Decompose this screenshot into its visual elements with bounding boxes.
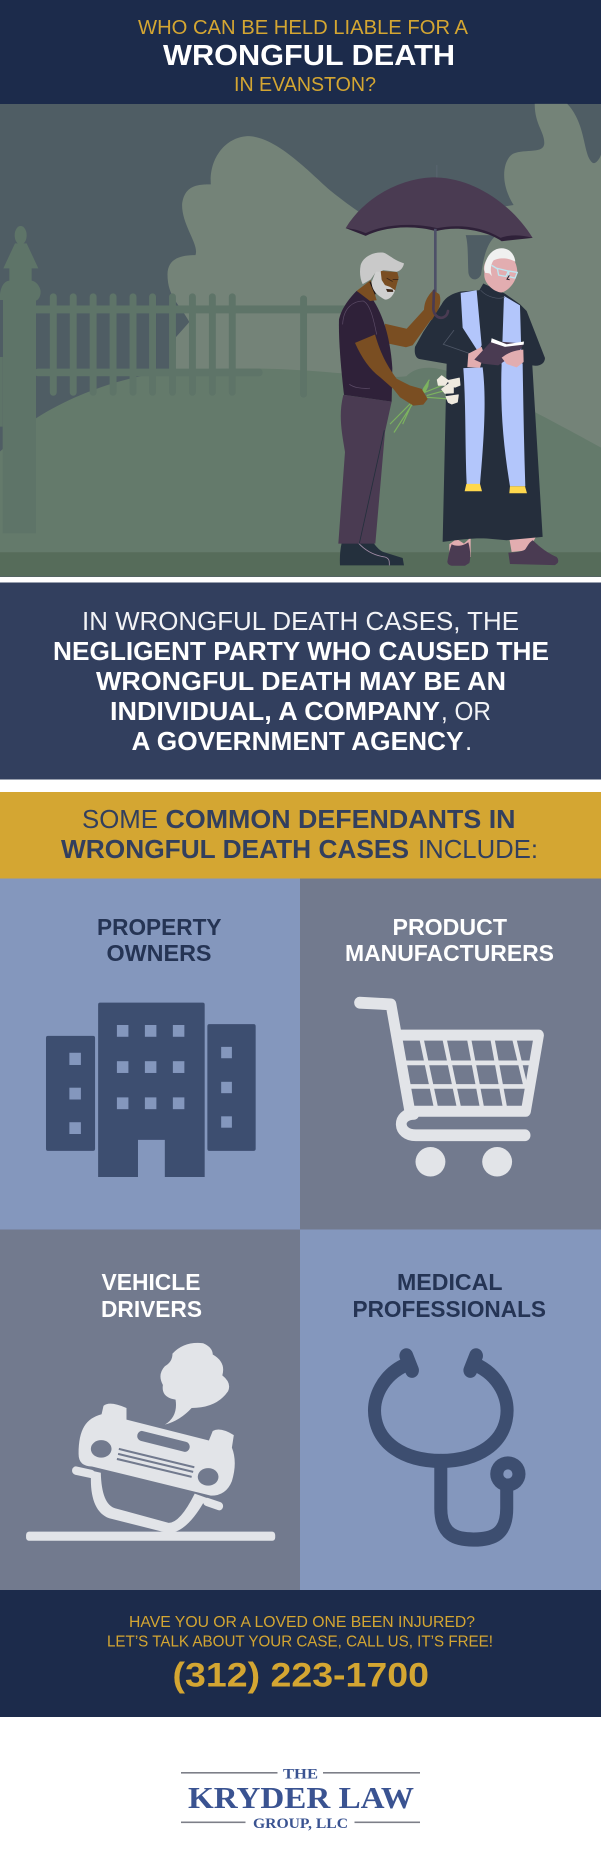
panel: negligent party statement: INDIVIDUAL, A COMPANY xyxy=(110,696,440,726)
heading: common defendants: SOME xyxy=(82,804,158,834)
illustration: mourning man xyxy=(338,252,460,565)
panel: negligent party statement: A GOVERNMENT AGENCY xyxy=(132,726,464,756)
icon: buildings xyxy=(46,1003,256,1177)
logo: The Kryder Law Group, LLC: KRYDER LAW xyxy=(188,1780,414,1815)
panel: medical professionals xyxy=(300,1230,601,1590)
title: WRONGFUL DEATH xyxy=(163,40,455,72)
panel: call to action: (312) 223-1700 xyxy=(172,1656,429,1694)
illustration: funeral scene xyxy=(0,104,601,577)
illustration: trees xyxy=(168,104,601,470)
heading: common defendants: WRONGFUL DEATH CASES xyxy=(61,834,409,864)
title: WHO CAN BE HELD LIABLE FOR A xyxy=(138,17,469,39)
panel: vehicle drivers xyxy=(0,1230,300,1590)
panel: property owners: PROPERTY xyxy=(97,914,222,940)
illustration: fence post xyxy=(0,226,41,533)
panel: negligent party statement: WRONGFUL DEATH MAY BE AN xyxy=(96,666,506,696)
panel: call to action: LET’S TALK ABOUT YOUR CASE, CALL US, IT’S FREE! xyxy=(107,1634,493,1650)
logo: The Kryder Law Group, LLC: THE xyxy=(283,1766,318,1782)
icon: overturned car with smoke xyxy=(26,1343,275,1541)
panel: medical professionals: MEDICAL xyxy=(397,1269,502,1295)
panel: negligent party statement: . xyxy=(465,726,472,756)
illustration: lily bouquet xyxy=(390,376,460,433)
panel: property owners: OWNERS xyxy=(106,940,212,966)
panel: negligent party statement: , OR xyxy=(441,696,491,726)
illustration: priest xyxy=(415,248,558,566)
panel: product manufacturers: MANUFACTURERS xyxy=(345,940,554,966)
panel: negligent party statement: IN WRONGFUL DEATH CASES, THE xyxy=(82,606,519,636)
heading: common defendants: COMMON DEFENDANTS IN xyxy=(166,804,516,834)
panel: call to action xyxy=(0,1590,601,1717)
illustration: left gap beside post xyxy=(0,300,3,357)
logo: The Kryder Law Group, LLC: GROUP, LLC xyxy=(253,1816,348,1832)
heading: common defendants xyxy=(0,792,601,879)
panel: vehicle drivers: VEHICLE xyxy=(102,1269,200,1295)
panel: product manufacturers xyxy=(300,878,601,1230)
icon: shopping cart xyxy=(360,1003,539,1177)
panel: vehicle drivers: DRIVERS xyxy=(101,1296,202,1322)
panel: call to action: HAVE YOU OR A LOVED ONE BEEN INJURED? xyxy=(129,1614,475,1631)
panel: negligent party statement xyxy=(0,582,601,780)
logo: The Kryder Law Group, LLC xyxy=(181,1766,420,1832)
panel: medical professionals: PROFESSIONALS xyxy=(352,1296,546,1322)
panel: product manufacturers: PRODUCT xyxy=(392,914,507,940)
title: IN EVANSTON? xyxy=(234,74,376,96)
heading: common defendants: INCLUDE: xyxy=(418,834,538,864)
panel: negligent party statement: NEGLIGENT PARTY WHO CAUSED THE xyxy=(53,636,549,666)
panel: property owners xyxy=(0,878,300,1230)
illustration: fence xyxy=(34,293,345,398)
title xyxy=(0,0,601,104)
icon: stethoscope xyxy=(375,1356,526,1540)
illustration: umbrella xyxy=(346,165,533,293)
illustration: hill xyxy=(0,368,601,576)
